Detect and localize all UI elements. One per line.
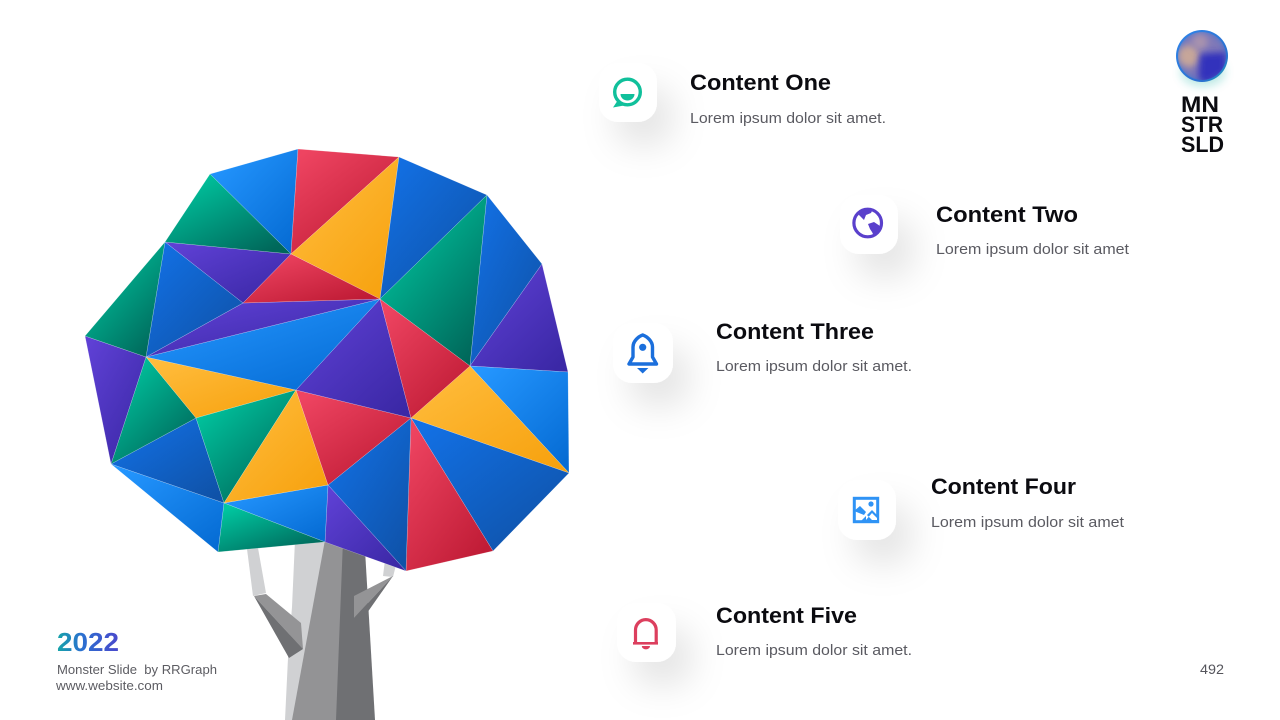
page number: 492 [1200,661,1224,677]
item: content four [838,474,1125,540]
description: content five: Lorem ipsum dolor sit amet. [716,642,912,659]
item: content one [599,63,886,127]
logo wordmark: MN [1181,92,1219,117]
tree trunk and branches [247,540,396,720]
description: content four: Lorem ipsum dolor sit amet [931,514,1125,531]
icon card: image [838,480,896,540]
logo sphere [1176,30,1228,86]
description: content two: Lorem ipsum dolor sit amet [936,241,1130,258]
icon card: globe [840,195,898,254]
year 2022: 2022 [57,627,119,657]
heading: content one: Content One [690,70,831,95]
icon card: bell [617,603,676,662]
heading: content four: Content Four [931,474,1076,499]
item: content two [840,195,1130,258]
credit line: Monster Slide by RRGraph [57,662,217,677]
description: content three: Lorem ipsum dolor sit amet. [716,358,912,375]
polygonal tree canopy [85,149,569,571]
item: content five [617,603,912,662]
heading: content five: Content Five [716,603,857,628]
website: www.website.com [55,678,163,693]
logo: MN STR SLD: STR [1181,112,1223,137]
footer: year and credits [55,627,217,693]
logo: MN STR SLD [1176,30,1228,157]
tree illustration [85,149,569,720]
heading: content three: Content Three [716,319,874,344]
logo: MN STR SLD: SLD [1181,132,1224,157]
heading: content two: Content Two [936,202,1078,227]
icon card: rocket bell [613,323,673,383]
icon card: chat [599,63,657,122]
item: content three [613,319,912,383]
description: content one: Lorem ipsum dolor sit amet. [690,110,886,127]
